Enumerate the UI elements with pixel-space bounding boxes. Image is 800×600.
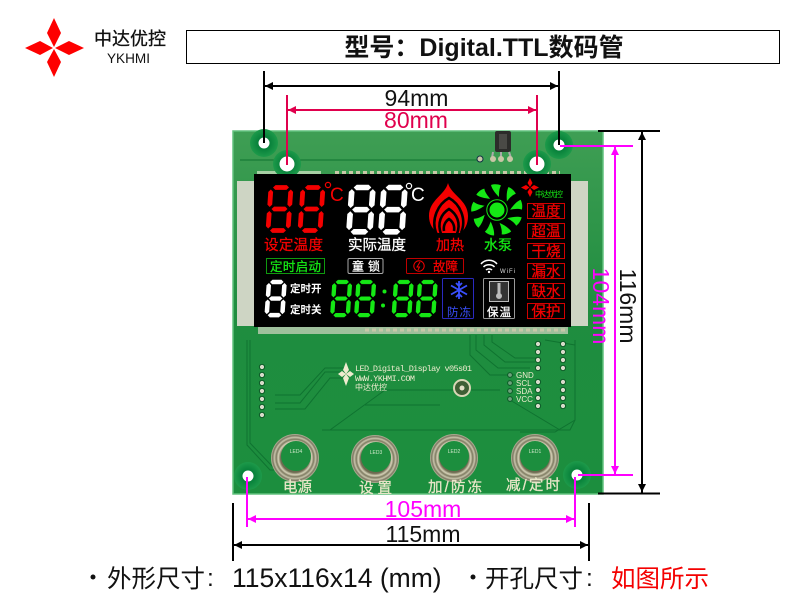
silkscreen logo [338, 362, 354, 386]
timer start tag: 定时启动 [270, 259, 321, 274]
status tag labels: 温度 [532, 204, 560, 220]
clock digits [330, 280, 438, 317]
status tag labels: 漏水 [532, 264, 561, 280]
fault tag: 故障 [433, 259, 458, 274]
button labels: 加/防冻 [428, 478, 482, 496]
dimension: 94mm [264, 71, 559, 145]
status tag labels: 缺水 [532, 284, 561, 300]
child lock tag: 童 锁 [352, 258, 380, 274]
silkscreen text: SDA [516, 387, 533, 396]
silkscreen text: WWW.YKHMI.COM [355, 374, 415, 384]
button: set [351, 435, 399, 483]
red degree symbol: C [330, 185, 344, 206]
spec: outer size [90, 563, 442, 593]
dimension: 105mm: 105mm [385, 496, 461, 522]
dimension: 94mm: 94mm [385, 85, 448, 111]
antifreeze tag [442, 278, 474, 319]
label: set temperature: 设定温度 [264, 237, 323, 254]
status tag labels: 超温 [532, 224, 560, 240]
dimension: 104mm: 104mm [588, 268, 614, 344]
button labels: 电源 [283, 479, 312, 496]
actual temperature digits [346, 185, 408, 234]
button: plus: LED2 [448, 449, 460, 455]
company latin name: YKHMI [107, 50, 150, 66]
circuit board [233, 129, 603, 497]
silkscreen text: 中达优控 [355, 382, 387, 392]
red degree symbol [325, 182, 344, 206]
spec: cutout size: : [586, 565, 593, 592]
capacitor C5 [454, 380, 470, 396]
button: set: LED3 [370, 450, 382, 456]
silkscreen text: VCC [516, 395, 533, 404]
small logo [521, 178, 563, 199]
silkscreen text [355, 364, 534, 404]
label: heating: 加热 [436, 237, 464, 253]
touch buttons [271, 434, 559, 483]
label: actual temperature: 实际温度 [348, 237, 406, 254]
dimension: 115mm: 115mm [386, 521, 460, 547]
board traces [240, 160, 575, 470]
dimension: 105mm [247, 477, 575, 527]
infrared receiver [477, 131, 513, 162]
small logo: 中达优控 [535, 189, 563, 199]
dimension: 80mm: 80mm [384, 107, 448, 133]
timer small digit [265, 280, 287, 317]
button labels: 设置 [359, 480, 392, 497]
status tag labels: 干烧 [532, 244, 560, 260]
solder pads [259, 341, 566, 418]
status tags [528, 204, 564, 318]
dimension: 115mm [233, 503, 589, 561]
keep warm tag: 保温 [487, 305, 512, 319]
button: minus [511, 434, 559, 482]
spec: cutout size: 如图所示 [611, 565, 709, 593]
spec: cutout size [470, 565, 709, 593]
button: power [271, 434, 319, 482]
icon: flame [429, 183, 468, 234]
button labels [283, 477, 560, 497]
fault tag [406, 258, 464, 274]
mounting holes [234, 129, 591, 490]
spec: outer size: 外形尺寸 [107, 565, 205, 593]
icon: wifi: WiFi [500, 269, 515, 275]
logo [25, 18, 166, 77]
icon: wifi [481, 260, 515, 275]
silkscreen text: GND [516, 371, 534, 380]
LCD connector pins [257, 171, 568, 334]
dimension: 80mm [287, 95, 537, 165]
spec: outer size: 115x116x14 (mm) [232, 563, 442, 593]
white degree symbol [406, 183, 425, 206]
label: timer on: 定时开 [290, 282, 322, 295]
icon: pump fan [471, 184, 523, 236]
button: minus: LED1 [529, 449, 541, 455]
label: water pump: 水泵 [484, 237, 512, 253]
LCD display [254, 174, 571, 327]
antifreeze tag: 防冻 [447, 305, 471, 319]
button: plus [430, 434, 478, 482]
spec: outer size: : [207, 565, 214, 592]
keep warm tag [484, 278, 514, 319]
status tag labels: 保护 [532, 304, 560, 320]
dimension: 116mm [598, 131, 660, 494]
silkscreen text: SCL [516, 379, 532, 388]
status tag labels [532, 204, 561, 320]
dimension: 104mm [560, 146, 633, 475]
title box [186, 30, 780, 64]
dimension: 116mm: 116mm [615, 268, 641, 344]
set temperature digits [265, 185, 326, 233]
silkscreen text: LED_Digital_Display v05s01 [355, 364, 472, 374]
company name: 中达优控 [94, 29, 166, 49]
button: power: LED4 [290, 449, 302, 455]
LCD side strips [237, 181, 588, 326]
spec: cutout size: 开孔尺寸 [485, 565, 583, 593]
white degree symbol: C [411, 185, 425, 206]
label: timer off: 定时关 [290, 303, 322, 316]
icon: thermometer [490, 282, 508, 302]
icon: red four-point star [25, 18, 84, 77]
button labels: 减/定时 [506, 477, 560, 494]
title box: 型号：Digital.TTL数码管 [344, 34, 624, 62]
icon: snowflake [451, 281, 467, 299]
